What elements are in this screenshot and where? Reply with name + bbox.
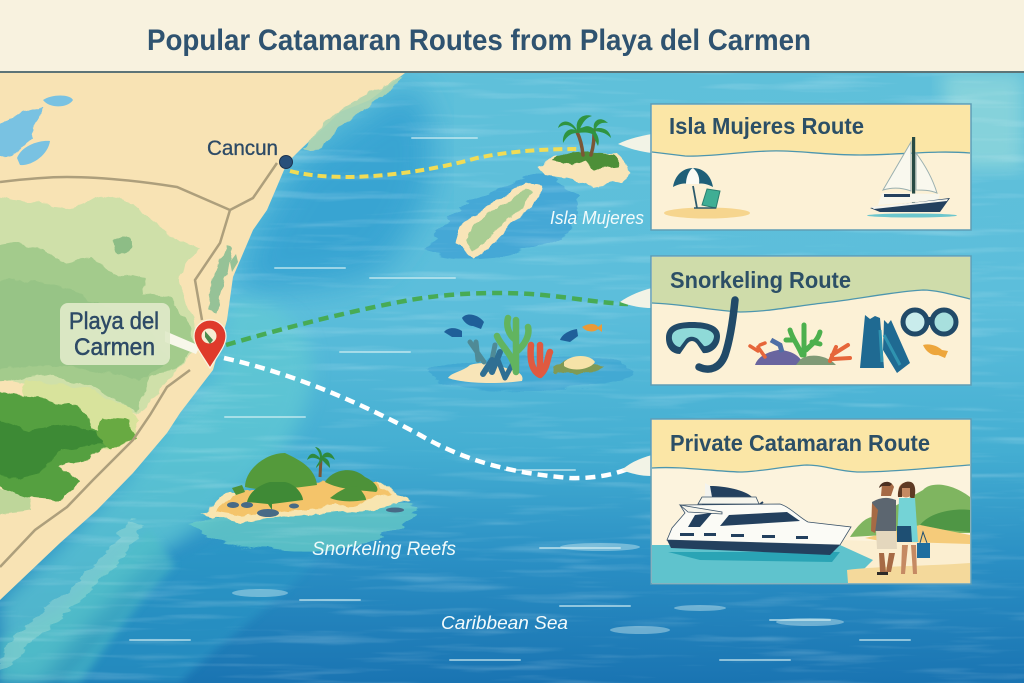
island: palm island xyxy=(537,115,632,187)
illustration: reef island xyxy=(444,315,604,383)
panel heading: Snorkeling Route xyxy=(670,267,851,293)
icon: sailboat xyxy=(867,137,957,218)
island: snorkeling reefs xyxy=(200,447,410,523)
icon: mask and snorkel xyxy=(666,300,735,369)
heading: Private Catamaran Route xyxy=(670,430,930,456)
icon: yacht xyxy=(667,483,851,555)
lagoons xyxy=(0,108,43,157)
icon: fish xyxy=(444,315,602,342)
title banner xyxy=(0,0,1024,73)
label: Snorkeling Reefs: Snorkeling Reefs xyxy=(312,539,456,560)
icon: fins xyxy=(860,315,910,373)
coast reef xyxy=(302,75,405,150)
forest light xyxy=(0,193,200,518)
island: Isla Mujeres long island xyxy=(457,182,540,258)
routes xyxy=(224,149,640,478)
mainland xyxy=(0,73,405,600)
icon: small fish xyxy=(923,344,948,358)
forest dark xyxy=(20,380,140,450)
icon: coral xyxy=(750,325,850,365)
label: Playa del Carmen: Playa del xyxy=(69,308,159,335)
icon: couple xyxy=(871,482,930,575)
icon: location pin xyxy=(194,320,226,368)
label: Playa del Carmen: Carmen xyxy=(74,334,155,361)
panel: Isla Mujeres Route xyxy=(618,104,971,230)
panel: Snorkeling Route xyxy=(620,256,971,385)
scene: beach and water xyxy=(652,485,970,583)
label: Cancun: Cancun xyxy=(207,137,278,160)
route: private catamaran xyxy=(224,358,640,478)
panel heading: Isla Mujeres Route xyxy=(669,113,864,139)
panel: Private Catamaran Route xyxy=(622,419,971,584)
roads xyxy=(0,163,277,567)
title: Popular Catamaran Routes from Playa del Carmen xyxy=(147,24,811,57)
label: Caribbean Sea: Caribbean Sea xyxy=(441,612,568,633)
route: snorkeling xyxy=(226,293,628,345)
icon: beach umbrella xyxy=(664,168,750,218)
route: Isla Mujeres xyxy=(290,149,577,177)
label: Isla Mujeres: Isla Mujeres xyxy=(550,208,644,228)
label: Cancun xyxy=(207,137,292,168)
label: Playa del Carmen xyxy=(60,303,200,365)
icon: goggles xyxy=(903,310,956,334)
